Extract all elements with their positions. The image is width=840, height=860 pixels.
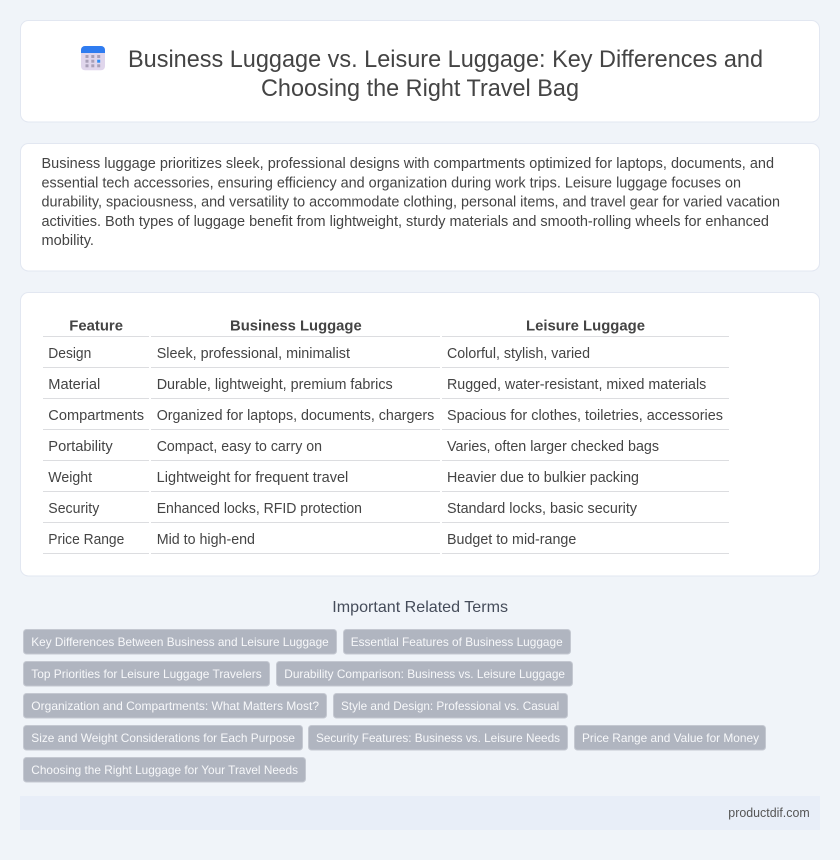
tag: [24, 630, 336, 654]
table row: Compartments: Compartments: [48, 408, 144, 424]
table header row: Business Luggage: [230, 318, 362, 334]
tag: Top Priorities for Leisure Luggage Travelers: [31, 667, 262, 681]
panel: title header: [20, 20, 820, 122]
panel: comparison table: [20, 292, 820, 576]
table row: Design: Design: [48, 346, 91, 362]
text block: introduction paragraph: essential tech accessories, ensuring efficiency and organization during work trips. Leisure luggage focuses on: [42, 175, 741, 191]
title: Business Luggage vs. Leisure Luggage: Key Differences and: [128, 46, 763, 73]
table header row: [43, 318, 729, 337]
tag: Durability Comparison: Business vs. Leisure Luggage: [284, 667, 565, 681]
tag: [308, 726, 568, 750]
table row: Design: Sleek, professional, minimalist: [157, 346, 350, 362]
tag: [574, 726, 766, 750]
tag: Key Differences Between Business and Leisure Luggage: [31, 635, 329, 649]
table header row: Leisure Luggage: [526, 318, 645, 334]
tag: Size and Weight Considerations for Each Purpose: [31, 731, 295, 745]
table row: Material: Durable, lightweight, premium fabrics: [157, 377, 393, 393]
tag: [276, 662, 572, 686]
panel: related term tags: [24, 630, 766, 782]
text block: introduction paragraph: [42, 156, 780, 249]
tag: [24, 662, 270, 686]
table row: Price Range: Mid to high-end: [157, 532, 255, 548]
table row: Price Range: Budget to mid-range: [447, 532, 576, 548]
title: [128, 46, 763, 102]
table row: Weight: Weight: [48, 470, 92, 486]
icon: calendar: [81, 46, 105, 70]
table row: Compartments: Spacious for clothes, toiletries, accessories: [447, 408, 723, 424]
table row: Security: Enhanced locks, RFID protection: [157, 501, 362, 517]
text block: introduction paragraph: durability, spaciousness, and versatility to accommodate clothing, personal items, and travel gear for varied vacation: [42, 195, 780, 211]
table row: Material: [43, 377, 729, 399]
tag: Style and Design: Professional vs. Casual: [341, 699, 559, 713]
table row: Weight: Heavier due to bulkier packing: [447, 470, 639, 486]
footer: productdif.com: [728, 805, 810, 820]
tag: Price Range and Value for Money: [582, 731, 759, 745]
footer: [20, 796, 820, 830]
table row: Price Range: Price Range: [48, 532, 124, 548]
table row: Design: [43, 346, 729, 368]
table row: Material: Rugged, water-resistant, mixed materials: [447, 377, 706, 393]
tag: Essential Features of Business Luggage: [351, 635, 563, 649]
table row: Compartments: Organized for laptops, documents, chargers: [157, 408, 434, 424]
table row: Portability: Varies, often larger checked bags: [447, 439, 659, 455]
table row: Compartments: [43, 408, 729, 430]
panel: introduction: [20, 144, 820, 271]
tag: [24, 694, 326, 718]
tag: [344, 630, 570, 654]
table row: Security: Standard locks, basic security: [447, 501, 638, 517]
tag: Security Features: Business vs. Leisure Needs: [316, 731, 560, 745]
table row: Price Range: [43, 532, 729, 554]
table row: Portability: Portability: [48, 439, 113, 455]
tag: [24, 758, 306, 782]
table row: Portability: [43, 439, 729, 461]
title: Choosing the Right Travel Bag: [261, 75, 579, 102]
tag: Organization and Compartments: What Matters Most?: [31, 699, 319, 713]
table row: Material: Material: [48, 377, 100, 393]
table row: Security: Security: [48, 501, 100, 517]
table row: Design: Colorful, stylish, varied: [447, 346, 590, 362]
table row: Weight: Lightweight for frequent travel: [157, 470, 348, 486]
table row: Security: [43, 501, 729, 523]
table row: Weight: [43, 470, 729, 492]
table header row: Feature: [69, 318, 123, 334]
heading: Important Related Terms: Important Related Terms: [332, 599, 508, 616]
text block: introduction paragraph: activities. Both types of luggage benefit from lightweight, sturdy materials and smooth-rolling wheels for enhanced: [42, 214, 769, 230]
table row: Portability: Compact, easy to carry on: [157, 439, 322, 455]
text block: introduction paragraph: Business luggage prioritizes sleek, professional designs with compartments optimized for laptops, documents, and: [42, 156, 774, 172]
tag: [24, 726, 302, 750]
tag: Choosing the Right Luggage for Your Travel Needs: [31, 763, 298, 777]
tag: [334, 694, 568, 718]
text block: introduction paragraph: mobility.: [42, 233, 94, 249]
